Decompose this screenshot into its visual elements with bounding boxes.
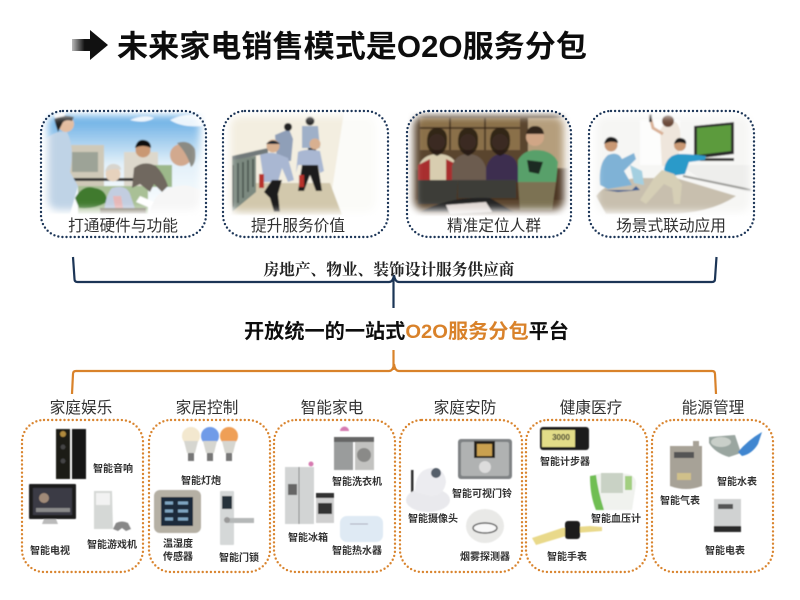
orange bracket xyxy=(72,350,716,394)
icon: water meter xyxy=(709,432,762,457)
label: 传感器 xyxy=(163,550,193,563)
label: 智能摄像头 xyxy=(408,512,458,525)
icon: smart watch xyxy=(532,521,602,545)
category title: 健康医疗 xyxy=(560,399,622,417)
icon: IP camera xyxy=(406,468,450,512)
icon: fridge and oven xyxy=(285,462,334,524)
platform heading: 开放统一的一站式O2O服务分包平台 xyxy=(244,320,569,343)
panel: 健康医疗 xyxy=(526,399,647,572)
dotted frame xyxy=(41,111,206,237)
photo: family playing motion game xyxy=(590,112,754,216)
caption: 场景式联动应用 xyxy=(616,216,726,235)
dotted frame xyxy=(400,420,522,572)
label: 智能计步器 xyxy=(540,455,590,468)
icon: washing machines xyxy=(334,426,374,470)
dotted frame xyxy=(22,420,143,572)
photo: security guards on stairs xyxy=(228,114,344,216)
icon: blood pressure monitor xyxy=(590,473,636,510)
caption: 精准定位人群 xyxy=(447,217,541,235)
label: 智能冰箱 xyxy=(288,531,328,544)
label: 智能电视 xyxy=(30,544,70,557)
panel: 提升服务价值 xyxy=(223,111,388,237)
icon: pedometer xyxy=(540,427,589,450)
label: 智能电表 xyxy=(705,544,745,557)
dotted frame xyxy=(526,420,647,572)
label: 智能洗衣机 xyxy=(332,475,382,488)
dotted frame xyxy=(407,111,571,237)
icon: door lock xyxy=(220,491,254,545)
label: 智能门锁 xyxy=(219,551,259,564)
icon: speakers xyxy=(56,429,86,479)
label: 智能手表 xyxy=(547,550,587,563)
category title: 家庭安防 xyxy=(434,399,496,417)
label: 温湿度 xyxy=(163,537,193,550)
photo: four men on a sofa xyxy=(408,112,570,216)
label: 智能音响 xyxy=(93,462,133,475)
dotted frame xyxy=(149,420,270,572)
panel: 打通硬件与功能 xyxy=(41,111,206,237)
label: 烟雾探测器 xyxy=(460,550,510,563)
label: 智能气表 xyxy=(660,494,700,507)
label: 智能游戏机 xyxy=(87,538,137,551)
icon: game console xyxy=(94,491,131,531)
supplier label: 房地产、物业、装饰设计服务供应商 xyxy=(264,260,515,279)
title text: 未来家电销售模式是O2O服务分包 xyxy=(117,30,587,64)
panel: 家居控制 xyxy=(149,399,270,572)
category title: 能源管理 xyxy=(682,399,745,417)
icon: smart TV xyxy=(29,484,76,524)
icon: right arrow xyxy=(72,30,108,60)
label: 智能水表 xyxy=(717,475,757,488)
dotted frame xyxy=(274,420,395,572)
photo: family and nurse xyxy=(42,112,206,216)
panel: 精准定位人群 xyxy=(407,111,571,237)
icon: smoke detector xyxy=(466,509,504,543)
icon: gas meter xyxy=(670,441,702,489)
dotted frame xyxy=(589,111,754,237)
panel: 场景式联动应用 xyxy=(589,111,754,237)
category title: 家居控制 xyxy=(176,399,238,417)
label: 智能可视门铃 xyxy=(452,487,512,500)
caption: 提升服务价值 xyxy=(251,217,345,235)
panel: 家庭安防 xyxy=(400,399,522,572)
dotted frame xyxy=(223,111,388,237)
dotted frame xyxy=(652,420,773,572)
icon: electric meter xyxy=(714,499,741,532)
icon: humidity sensor xyxy=(154,490,201,533)
category title: 家庭娱乐 xyxy=(50,399,113,417)
label: 智能灯炮 xyxy=(181,474,221,487)
panel: 能源管理 xyxy=(652,399,773,572)
panel: 家庭娱乐 xyxy=(22,399,143,572)
label: 智能热水器 xyxy=(332,544,382,557)
title xyxy=(72,30,587,64)
panel: 智能家电 xyxy=(274,399,395,572)
icon: smart bulbs xyxy=(182,427,238,461)
caption: 打通硬件与功能 xyxy=(68,217,178,235)
icon: water heater xyxy=(340,516,383,542)
category title: 智能家电 xyxy=(301,399,364,417)
label: 智能血压计 xyxy=(591,512,641,525)
navy bracket xyxy=(73,257,716,308)
icon: pedometer: 3000 xyxy=(552,433,570,442)
icon: video doorbell xyxy=(458,439,512,479)
